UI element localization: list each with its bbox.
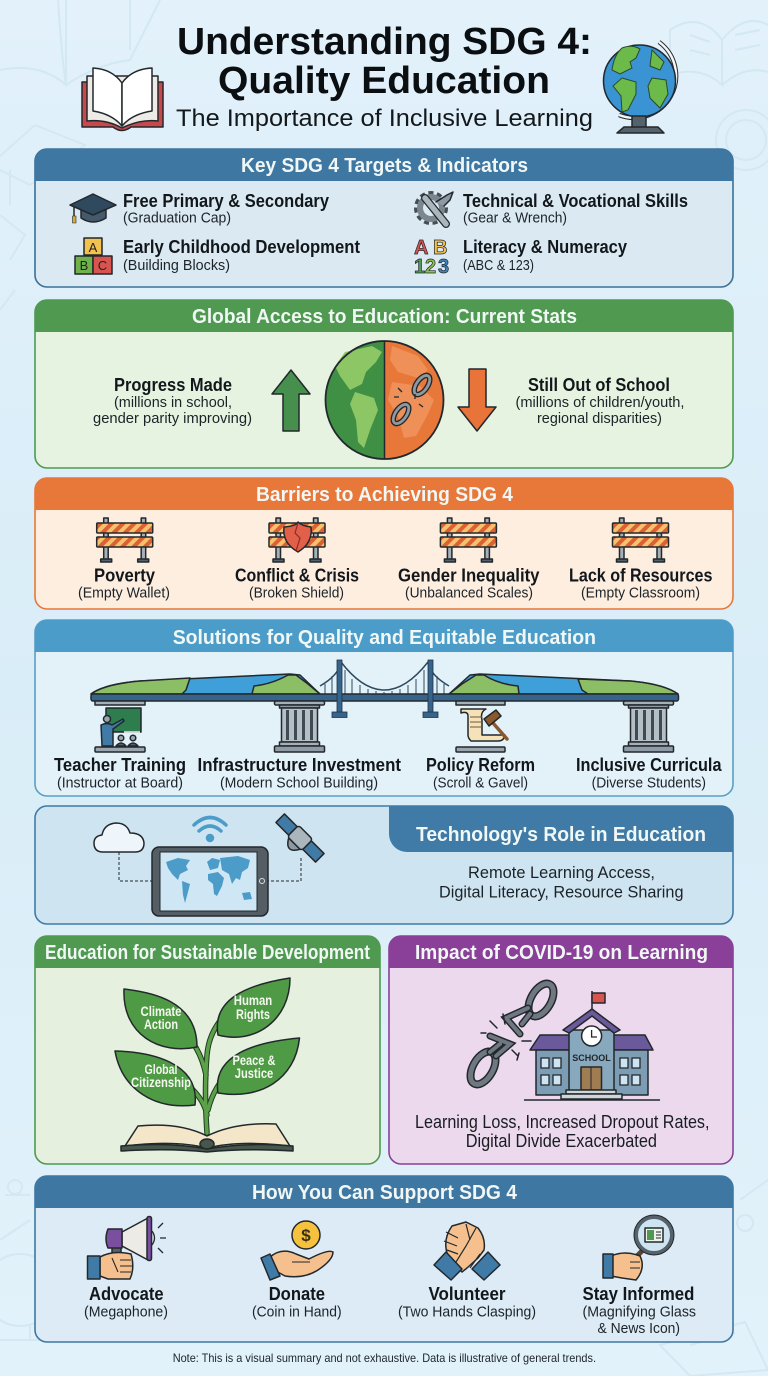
heading: Barriers to Achieving SDG 4: [256, 484, 514, 506]
icon: plant growing from book: Rights: [236, 1006, 270, 1022]
icon: school building: SCHOOL: [572, 1053, 611, 1063]
body text: Digital Divide Exacerbated: [466, 1131, 657, 1151]
barrier: gender: Gender Inequality: [398, 566, 540, 586]
barrier: poverty: [78, 518, 170, 602]
solution: inclusive curricula: Inclusive Curricula: [576, 755, 722, 775]
icon: open book: [82, 68, 163, 130]
action: advocate: Advocate: [89, 1284, 164, 1304]
icon: plant growing from book: Citizenship: [131, 1074, 191, 1090]
barrier: resources: [569, 518, 712, 602]
solution: infrastructure: [198, 755, 401, 792]
icon: megaphone: [88, 1216, 166, 1279]
icon: ABC and 123: A: [414, 237, 428, 259]
action: advocate: (Megaphone): [84, 1304, 168, 1320]
target: literacy: (ABC & 123): [463, 257, 534, 274]
panel: impact of covid: [389, 936, 733, 1164]
action: volunteer: (Two Hands Clasping): [398, 1304, 536, 1320]
title line 1: Understanding SDG 4:: [177, 21, 592, 63]
arrow: down: [458, 369, 496, 431]
action: stay informed: [582, 1284, 696, 1337]
connectors: [119, 852, 301, 881]
icon: plant growing from book: Human: [234, 992, 272, 1008]
leaf labels: Climate: [140, 1003, 182, 1019]
barrier: gender: (Unbalanced Scales): [405, 584, 533, 602]
icon: broken chain: [390, 373, 433, 426]
heading: Solutions for Quality and Equitable Education: [173, 627, 596, 649]
target: early childhood: (Building Blocks): [123, 257, 230, 274]
icon: building blocks: C: [98, 258, 107, 273]
solution: policy reform: [426, 755, 535, 792]
body text: [439, 863, 684, 902]
panel: solutions: [35, 620, 733, 796]
still out of school text: regional disparities): [537, 410, 662, 427]
bridge illustration: [91, 660, 678, 752]
solution: teacher training: [54, 755, 186, 792]
still out of school text: Still Out of School: [528, 375, 670, 395]
icon: broken chain: [465, 979, 559, 1089]
progress made text: Progress Made: [114, 375, 232, 395]
icon: plant growing from book: Justice: [235, 1065, 273, 1081]
action: donate: (Coin in Hand): [252, 1304, 342, 1320]
heading: Education for Sustainable Development: [45, 942, 370, 964]
icon: satellite: [270, 813, 325, 868]
target: free primary: [123, 191, 329, 226]
target: technical skills: Technical & Vocational Skills: [463, 191, 688, 211]
still out of school text: [516, 375, 684, 427]
icon: split globe with broken chain: [325, 341, 444, 459]
title line 2: Quality Education: [218, 60, 550, 102]
panel: key targets: [35, 149, 733, 287]
panel: education for sustainable development: [35, 936, 380, 1164]
leaf: climate action: [124, 989, 197, 1049]
solution: policy reform: (Scroll & Gavel): [433, 774, 528, 792]
barrier: resources: Lack of Resources: [569, 566, 712, 586]
target: technical skills: [463, 191, 688, 226]
action: stay informed: & News Icon): [598, 1320, 680, 1337]
icon: building blocks: B: [80, 258, 88, 273]
barrier: conflict: (Broken Shield): [249, 584, 344, 602]
icon: two hands clasping: [434, 1222, 500, 1280]
solution: policy reform: Policy Reform: [426, 755, 535, 775]
barrier: poverty: Poverty: [94, 566, 155, 586]
open book base: [125, 1124, 290, 1148]
icon: coin in hand: [261, 1221, 333, 1280]
icon: cloud: [94, 823, 144, 852]
action: volunteer: [398, 1284, 536, 1320]
leaf: peace and justice: [217, 1038, 300, 1094]
icon: wifi: [194, 818, 226, 840]
footnote: Note: This is a visual summary and not exhaustive. Data is illustrative of general trends.: [173, 1351, 596, 1365]
barrier: conflict: [235, 518, 359, 602]
panel: technology: [35, 806, 733, 924]
action: donate: Donate: [269, 1284, 325, 1304]
subtitle: The Importance of Inclusive Learning: [176, 105, 593, 132]
icon: gear and wrench: [416, 192, 453, 224]
solution: inclusive curricula: (Diverse Students): [592, 774, 706, 792]
icon: scroll and gavel: [456, 709, 507, 752]
icon: magnifying glass and news: [603, 1215, 674, 1280]
barrier: resources: (Empty Classroom): [581, 584, 700, 602]
heading: Technology's Role in Education: [416, 824, 706, 846]
body text: Digital Literacy, Resource Sharing: [439, 882, 684, 902]
icon: plant growing from book: [115, 978, 300, 1152]
icon: instructor at board: [95, 708, 145, 752]
barrier: gender: [398, 518, 540, 602]
solution: inclusive curricula: [576, 755, 722, 792]
action: volunteer: Volunteer: [428, 1284, 506, 1304]
arrow: up: [272, 370, 310, 431]
action: stay informed: Stay Informed: [582, 1284, 694, 1304]
icon: building blocks: [75, 238, 112, 274]
icon: school building: [524, 991, 660, 1100]
icon: graduation cap: [70, 194, 116, 223]
target: literacy: [463, 237, 627, 274]
solution: teacher training: (Instructor at Board): [57, 774, 183, 792]
still out of school text: (millions of children/youth,: [516, 394, 684, 411]
icon: ABC and 123: B: [433, 237, 447, 259]
target: early childhood: Early Childhood Development: [123, 237, 360, 257]
icon: tablet with world map: [152, 847, 268, 916]
barrier: poverty: (Empty Wallet): [78, 584, 170, 602]
panel: how you can support: [35, 1176, 733, 1342]
solution: infrastructure: Infrastructure Investment: [198, 755, 401, 775]
leaf: human rights: [217, 978, 290, 1037]
target: free primary: (Graduation Cap): [123, 210, 231, 226]
action: donate: [252, 1284, 342, 1320]
target: literacy: Literacy & Numeracy: [463, 237, 627, 257]
target: technical skills: (Gear & Wrench): [463, 210, 567, 226]
barrier: conflict: Conflict & Crisis: [235, 566, 359, 586]
icon: ABC and 123: 1: [414, 256, 425, 278]
progress made text: gender parity improving): [93, 410, 252, 427]
icon: plant growing from book: Action: [144, 1016, 178, 1032]
icon: plant growing from book: Global: [144, 1061, 178, 1077]
icon: building blocks: A: [89, 240, 98, 255]
body text: Learning Loss, Increased Dropout Rates,: [415, 1112, 710, 1132]
body text: [415, 1112, 710, 1151]
icon: ABC and 123: 3: [438, 256, 449, 278]
action: advocate: [84, 1284, 168, 1320]
solution: teacher training: Teacher Training: [54, 755, 186, 775]
icon: coin in hand: $: [301, 1226, 311, 1245]
body text: Remote Learning Access,: [468, 863, 655, 882]
action: stay informed: (Magnifying Glass: [582, 1304, 696, 1320]
icon: plant growing from book: Peace &: [232, 1052, 276, 1068]
progress made text: [93, 375, 252, 427]
panel: barriers: [35, 478, 733, 609]
heading: Impact of COVID-19 on Learning: [415, 942, 708, 964]
target: free primary: Free Primary & Secondary: [123, 191, 329, 211]
progress made text: (millions in school,: [114, 394, 232, 411]
icon: ABC and 123: 2: [425, 256, 436, 278]
heading: Global Access to Education: Current Stats: [192, 306, 577, 328]
icon: ABC and 123: [414, 237, 449, 278]
heading: How You Can Support SDG 4: [252, 1182, 518, 1204]
leaf: global citizenship: [115, 1051, 195, 1106]
title block: [176, 21, 593, 132]
icon: desk globe: [604, 42, 676, 133]
panel: global access: [35, 300, 733, 468]
heading: Key SDG 4 Targets & Indicators: [241, 155, 528, 177]
solution: infrastructure: (Modern School Building): [220, 774, 378, 792]
target: early childhood: [123, 237, 360, 274]
